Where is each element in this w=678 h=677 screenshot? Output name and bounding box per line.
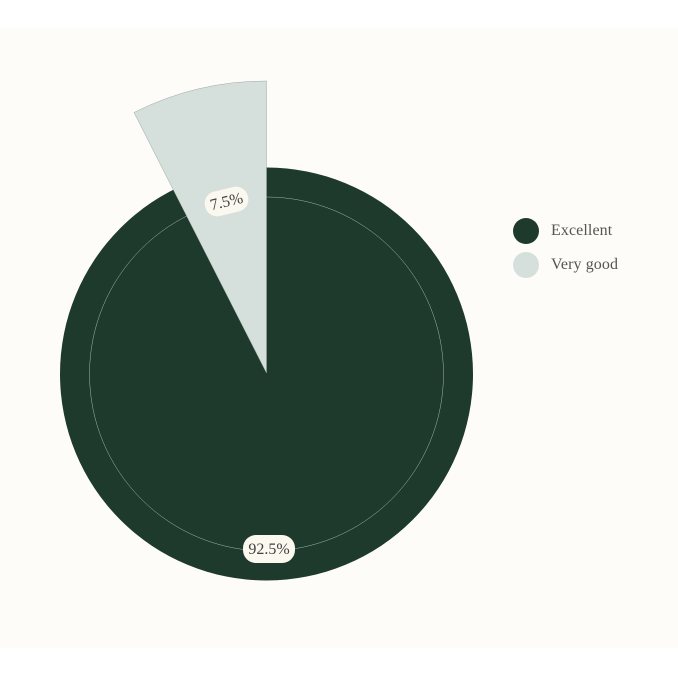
label: 7.5%: 7.5% (208, 190, 245, 214)
legend item: Excellent: Excellent (551, 222, 613, 239)
inner ring (90, 197, 444, 551)
label: 7.5% (202, 184, 251, 219)
chart: pie (60, 81, 473, 580)
legend item: Very good: Very good (551, 256, 618, 273)
legend (513, 218, 618, 278)
label: 92.5% (243, 535, 295, 563)
slice: Very good 7.5% (134, 81, 266, 373)
label: 92.5%: 92.5% (248, 541, 290, 558)
slice: Excellent 92.5% (60, 168, 473, 580)
